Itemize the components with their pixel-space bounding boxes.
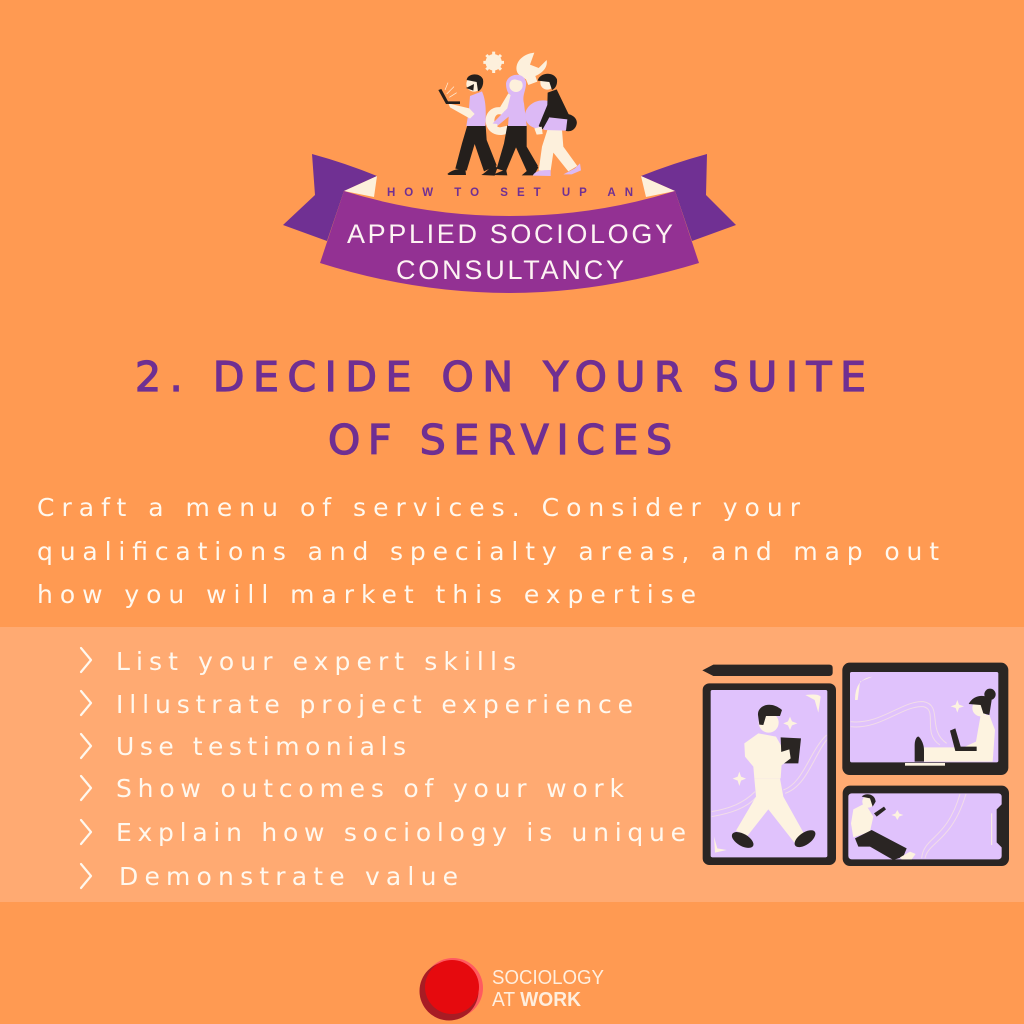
- intro text: qualifications and specialty areas, and map out: [37, 537, 939, 566]
- heading: 2. DECIDE ON YOUR SUITE: [135, 353, 866, 401]
- icon: light bulb: [525, 100, 577, 131]
- checklist: Explain how sociology is unique: [116, 818, 686, 847]
- heading: OF SERVICES: [328, 416, 672, 464]
- intro text: how you will market this expertise: [37, 580, 696, 609]
- checklist: List your expert skills: [116, 647, 516, 676]
- tablet with walking man: [703, 683, 836, 865]
- phone screen with sitting man: [843, 786, 1009, 866]
- laptop screen with seated woman: [842, 663, 1008, 775]
- icon: wrench: [516, 53, 547, 85]
- heading: [135, 353, 866, 464]
- illustration: people using devices: [702, 663, 1009, 866]
- banner title line 2: CONSULTANCY: [396, 255, 624, 285]
- person carrying bulb: [533, 74, 581, 176]
- intro text: Craft a menu of services. Consider your: [37, 493, 801, 522]
- intro text: [37, 493, 939, 609]
- logo wordmark: AT WORK: [492, 989, 582, 1011]
- logo wordmark: [492, 967, 604, 1011]
- ribbon fold right: [641, 176, 675, 197]
- checklist: Show outcomes of your work: [116, 774, 625, 803]
- ribbon tail right: [641, 154, 736, 241]
- icon: gear: [483, 52, 504, 73]
- panel: services band: [0, 627, 1024, 902]
- icon: stylus: [702, 665, 833, 676]
- ribbon tail left: [283, 154, 377, 241]
- ribbon fold left: [344, 176, 377, 197]
- banner ribbon: [283, 154, 736, 293]
- person with laptop: [438, 74, 497, 176]
- person in headscarf: [491, 75, 538, 175]
- illustration: three people carrying tools: [438, 52, 581, 176]
- checklist: Use testimonials: [116, 732, 406, 761]
- logo: Sociology at Work: [420, 958, 604, 1020]
- ribbon main: [320, 191, 699, 293]
- checklist: [81, 647, 686, 891]
- checklist: Demonstrate value: [119, 862, 458, 891]
- banner title line 1: APPLIED SOCIOLOGY: [347, 219, 673, 249]
- checklist: Illustrate project experience: [116, 690, 633, 719]
- logo wordmark: SOCIOLOGY: [492, 967, 604, 989]
- icon: ring spanner: [486, 107, 509, 135]
- logo mark: [420, 958, 483, 1020]
- banner kicker: HOW TO SET UP AN: [387, 187, 633, 199]
